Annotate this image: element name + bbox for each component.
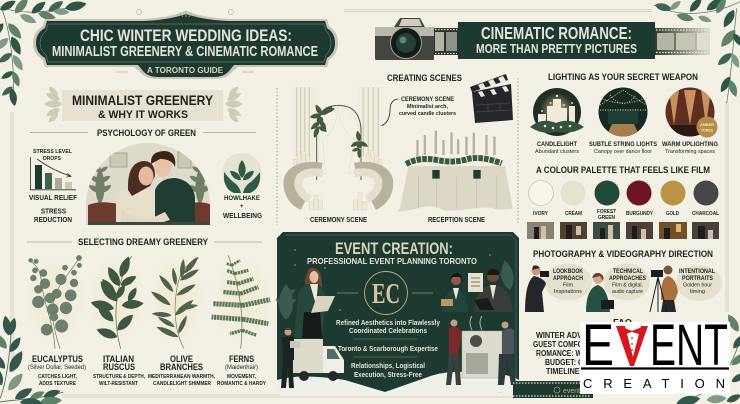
labels: scenes: RECEPTION SCENE xyxy=(428,215,485,224)
chart: stress level drops: STRESS xyxy=(41,206,66,216)
plant: fern xyxy=(212,254,272,387)
snow ground xyxy=(277,372,519,395)
colour swatches: GOLD xyxy=(666,211,679,217)
plant: italian ruscus: ITALIAN xyxy=(103,354,134,365)
icon: hands and leaves: HOWLHAKE xyxy=(224,195,261,202)
figures: planners with clipboard xyxy=(441,269,513,312)
bubble: intentional portraits: Golden hour xyxy=(683,282,712,288)
greenery: bottom right corner xyxy=(676,312,740,404)
callout: ceremony scene xyxy=(368,96,456,130)
badge: amber tones: TONES xyxy=(701,128,714,132)
section: FAQ: BUDGET: C xyxy=(545,358,583,367)
bubble: lookbook approach: LOOKBOOK xyxy=(553,269,584,275)
plant: eucalyptus xyxy=(23,254,87,387)
plant: olive branches: OLIVE xyxy=(170,354,193,365)
plant: italian ruscus: STRUCTURE & DEPTH, xyxy=(93,374,146,380)
figure: man with laptop xyxy=(281,328,300,388)
heading: minimalist greenery: MINIMALIST GREENERY xyxy=(72,93,213,108)
panel heading: PROFESSIONAL EVENT PLANNING TORONTO xyxy=(307,256,477,266)
section: FAQ xyxy=(533,318,632,376)
section: FAQ: GUEST COMFO xyxy=(533,340,583,349)
film strip footer xyxy=(513,381,593,398)
colour swatches: CREAM xyxy=(565,211,582,217)
icon: warm uplighting xyxy=(665,87,718,138)
bubble: intentional portraits: PORTRAITS xyxy=(682,276,713,282)
icon: camera with film strip xyxy=(375,18,458,60)
illustration: couple on sofa xyxy=(86,143,213,226)
plant: olive branches: MEDITERRANEAN WARMTH, xyxy=(148,374,216,380)
banner: cinematic romance xyxy=(458,22,710,59)
film strip footer: event xyxy=(563,388,580,395)
panel: event creation xyxy=(274,232,519,395)
banner: cinematic romance: MORE THAN PRETTY PICTURES xyxy=(476,42,637,56)
labels: lighting: Transforming spaces xyxy=(665,149,715,155)
panel heading xyxy=(307,239,477,266)
section: FAQ: WINTER ADV xyxy=(536,331,583,340)
illustration: ceremony scene xyxy=(289,87,388,210)
labels: lighting: SUBTLE STRING LIGHTS xyxy=(589,141,657,148)
plant: eucalyptus: EUCALYPTUS xyxy=(32,354,83,365)
bubble: intentional portraits: INTENTIONAL xyxy=(679,269,715,275)
title banner xyxy=(33,10,338,79)
figure: planner with clipboard xyxy=(294,268,335,338)
subheading: selecting dreamy greenery: SELECTING DREAMY GREENERY xyxy=(78,237,209,248)
labels: lighting: Abundant clusters xyxy=(535,149,579,155)
logo: event creation xyxy=(580,313,730,394)
panel heading: EVENT CREATION: xyxy=(335,239,453,258)
heading: creating scenes: CREATING SCENES xyxy=(387,73,462,84)
callout: ceremony scene: Minimalist arch, xyxy=(407,104,448,110)
figures: technicians with HVAC unit xyxy=(446,316,516,385)
plant: italian ruscus: WILT-RESISTANT xyxy=(99,381,139,387)
plant: italian ruscus xyxy=(88,254,146,387)
bubble: intentional portraits: timing xyxy=(690,289,705,295)
colour swatches: FOREST xyxy=(597,209,616,215)
section: FAQ: TIMELINE: xyxy=(546,367,582,376)
title banner: A TORONTO GUIDE xyxy=(147,66,224,75)
bubble: intentional portraits xyxy=(676,265,722,301)
plant: olive branches: BRANCHES xyxy=(160,362,203,373)
figure: technical photographer xyxy=(586,273,614,312)
chart: stress level drops: STRESS LEVEL xyxy=(33,149,72,155)
logo: event creation: CREATION xyxy=(583,376,725,391)
panel text: Toronto & Scarborough Expertise xyxy=(338,344,438,353)
plant: fern: ROMANTIC & HARDY xyxy=(217,381,266,387)
title banner: CHIC WINTER WEDDING IDEAS: xyxy=(80,26,292,45)
banner: cinematic romance: CINEMATIC ROMANCE: xyxy=(481,23,632,43)
plant: olive branches xyxy=(148,254,216,387)
badge: amber tones xyxy=(696,116,718,138)
logo: event creation: E xyxy=(582,313,614,378)
badge: amber tones: AMBER xyxy=(700,123,715,127)
illustration: reception scene xyxy=(398,131,513,212)
colour swatches: BURGUNDY xyxy=(626,211,653,217)
panel text: Execution, Stress-Free xyxy=(354,370,422,379)
colour swatches xyxy=(528,180,719,221)
plant: eucalyptus: ADDS TEXTURE xyxy=(39,381,76,387)
bubble: technical approaches xyxy=(604,264,650,300)
bubble: technical approaches: audio capture xyxy=(612,289,643,295)
bubble: lookbook approach: Inspirations xyxy=(554,289,582,295)
chart: stress level drops: VISUAL RELIEF xyxy=(29,193,77,202)
bubble: lookbook approach xyxy=(544,264,592,300)
colour swatches: GREEN xyxy=(598,215,615,221)
bubble: lookbook approach: Film xyxy=(563,282,573,288)
plant: fern: FERNS xyxy=(229,354,254,365)
icon: string lights xyxy=(598,87,648,137)
labels: scenes: CEREMONY SCENE xyxy=(310,215,367,224)
icon: hands and leaves: + xyxy=(240,204,244,210)
colour swatches: CHARCOAL xyxy=(692,211,719,217)
chart: stress level drops: DROPS xyxy=(43,156,61,162)
figure: videographer with tripod xyxy=(650,266,678,312)
chart: stress level drops xyxy=(29,149,77,224)
bubble: technical approaches: APPROACHES xyxy=(609,276,646,282)
labels: lighting xyxy=(535,141,718,155)
bubble: technical approaches: TECHNICAL xyxy=(613,269,643,275)
logo: EC monogram: EC xyxy=(372,279,400,310)
icon: hands and leaves: WELLBEING xyxy=(223,211,262,220)
callout: ceremony scene: curved candle clusters xyxy=(399,111,456,117)
chart: stress level drops: REDUCTION xyxy=(34,215,72,224)
labels: lighting: CANDLELIGHT xyxy=(537,141,578,148)
labels: lighting: WARM UPLIGHTING xyxy=(662,141,718,148)
section: FAQ: ROMANCE: W xyxy=(536,349,582,358)
panel text: Refined Aesthetics into Flawlessly xyxy=(336,318,441,327)
greenery: bottom left corner xyxy=(0,315,63,404)
callout: ceremony scene: CEREMONY SCENE xyxy=(401,96,455,103)
bubble: lookbook approach: APPROACH xyxy=(553,276,583,282)
heading: lighting: LIGHTING AS YOUR SECRET WEAPON xyxy=(548,72,698,83)
heading: minimalist greenery: & WHY IT WORKS xyxy=(98,109,188,121)
figure: delivery truck xyxy=(293,339,344,381)
greenery: top right corner xyxy=(654,0,740,103)
panel text: Coordinated Celebrations xyxy=(349,326,427,335)
plant: italian ruscus: RUSCUS xyxy=(103,362,135,373)
title banner: MINIMALIST GREENERY & CINEMATIC ROMANCE xyxy=(52,44,318,60)
plant: eucalyptus: CATCHES LIGHT, xyxy=(38,374,78,380)
panel text xyxy=(336,318,441,379)
subheading: psychology of green: PSYCHOLOGY OF GREEN xyxy=(97,128,196,139)
icon: hands and leaves xyxy=(222,153,262,220)
panel text: Relationships, Logistical xyxy=(351,361,425,370)
heading: photography direction: PHOTOGRAPHY & VIDEOGRAPHY DIRECTION xyxy=(533,249,713,260)
figure: lookbook photographer xyxy=(525,265,549,312)
labels: scenes xyxy=(310,215,485,224)
plant: olive branches: CANDLELIGHT SHIMMER xyxy=(153,381,211,387)
greenery: top left corner xyxy=(0,0,87,107)
film stills xyxy=(527,222,719,239)
plant: fern: (Maidenhair) xyxy=(225,365,258,371)
colour swatches: IVORY xyxy=(533,211,548,217)
section: FAQ: FAQ xyxy=(613,318,632,328)
heading: minimalist greenery xyxy=(44,85,243,124)
icon: clapperboard xyxy=(470,74,513,123)
logo: EC monogram xyxy=(337,272,433,314)
labels: lighting: Canopy over dance floor xyxy=(594,149,652,155)
plant: fern: MOVEMENT, xyxy=(227,374,257,380)
plant: eucalyptus: (Silver Dollar, Seeded) xyxy=(28,365,86,371)
heading: colour palette: A COLOUR PALETTE THAT FEELS LIKE FILM xyxy=(536,165,710,176)
bubble: technical approaches: Film & digital, xyxy=(612,282,643,288)
icon: candlelight xyxy=(530,88,584,136)
